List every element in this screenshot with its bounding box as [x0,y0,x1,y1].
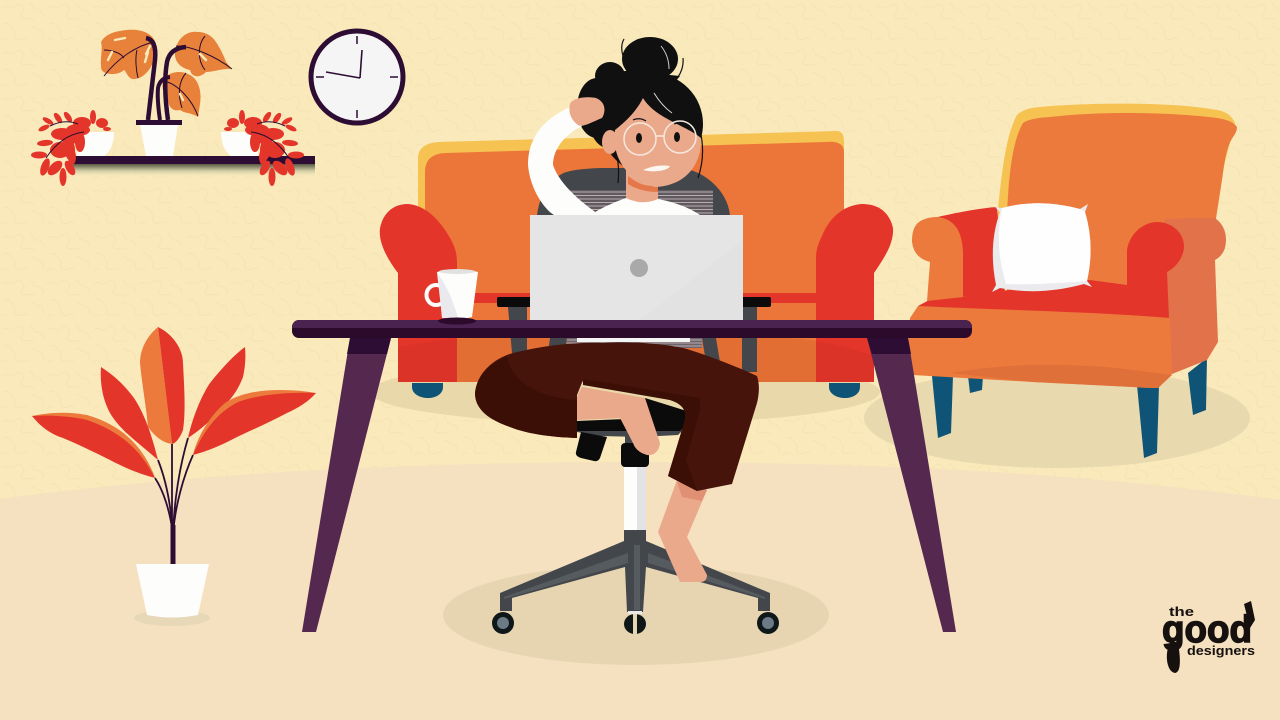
armchair legs [932,358,1207,458]
chair back mesh [563,190,713,215]
cushion block [576,432,607,461]
star base [500,530,770,612]
woman upper body [528,37,703,216]
armchair [908,104,1237,458]
stems [155,438,193,535]
icon: monstera plant in white pot [101,30,232,156]
logo: the good designers: the [1169,604,1194,619]
chair uprights below desk [548,338,720,362]
large floor plant [32,327,316,626]
laptop [530,215,743,320]
shade under desk [398,338,874,382]
crossed calf [576,387,660,455]
sofa back [425,142,844,382]
sofa left arm [380,204,457,382]
leaf: lower right [193,391,316,455]
woman legs [475,342,759,582]
icon: right hanging red plant [221,110,304,186]
lower mesh [567,338,702,348]
pot shadow [134,610,210,626]
wall shelf with plants [31,30,315,186]
desk [292,320,972,632]
wall background [0,0,1280,520]
raised arm [528,106,601,216]
armchair shadow [864,368,1250,468]
armchair seat shade [950,365,1172,388]
armchair red seat [918,280,1169,318]
ear [602,130,618,154]
seat post neck [625,436,634,445]
wheels [492,611,779,634]
armchair back [1007,113,1237,300]
sofa shadow [370,360,880,424]
white pot [136,564,209,618]
seat edge [577,430,683,437]
gas pole [624,467,646,530]
eyes [636,133,642,143]
icon: left hanging red plant [31,110,114,186]
office chair back and arms [497,168,771,372]
armchair back yellow edge [998,104,1235,220]
shelf [73,156,315,177]
logo: the good designers: designers [1187,643,1255,658]
office chair base [492,398,779,634]
leaf: upper right [188,347,245,438]
armchair left arm [912,217,963,301]
sofa red strip [450,293,825,303]
lower leg and foot [658,480,707,582]
trousers shadow [475,357,700,491]
coffee cup [426,269,478,324]
neck [626,170,658,204]
leaf: lower left [32,414,155,478]
pole block [621,443,649,467]
trousers [475,342,759,491]
fringe highlight [654,93,672,113]
armchair side panel [1150,218,1226,388]
logo: the good designers: good [1162,609,1252,651]
hand [569,97,604,126]
eyebrows [633,119,694,128]
chair back [537,168,730,240]
desk right leg [867,338,956,632]
hair back [577,37,703,175]
chair floor shadow [443,565,829,665]
chair armrests [497,297,530,353]
desk top [292,320,972,338]
icon: wall clock [311,31,403,123]
leaf: centre [140,327,172,444]
floor [0,462,1280,720]
face [614,98,701,187]
shirt [590,198,700,215]
leaf: upper left [101,367,158,460]
black seat [577,398,690,431]
mouth [643,166,670,171]
glasses [624,121,696,155]
armchair right arm [1127,222,1184,318]
sofa feet [412,383,860,398]
desk left leg [302,338,391,632]
sofa back yellow edge [418,131,844,240]
icon: white pillow [992,203,1092,292]
sofa [380,131,893,398]
logo: the good designers [1162,601,1255,673]
armchair seat front [908,306,1172,388]
armchair red back panel [933,207,1005,297]
sofa right arm [816,204,893,382]
